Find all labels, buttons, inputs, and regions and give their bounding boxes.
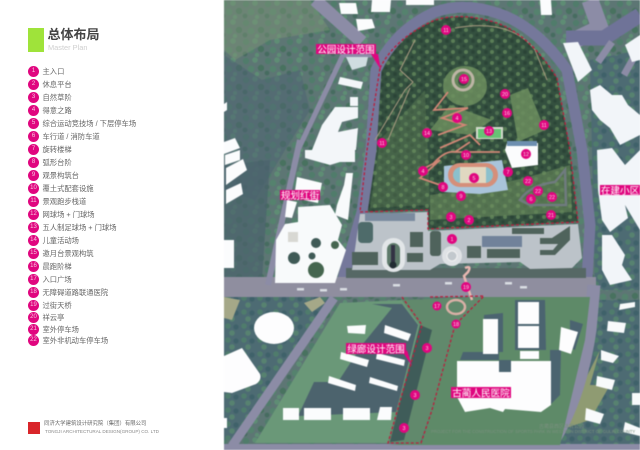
roundabout entrance bbox=[442, 246, 462, 266]
car path east bbox=[520, 170, 566, 205]
legend item 2: 2 bbox=[32, 81, 35, 87]
numbered map markers: 21 bbox=[548, 213, 554, 219]
legend item 2: 休息平台 bbox=[42, 80, 72, 89]
numbered map markers: 20 bbox=[502, 92, 508, 98]
numbered map markers: 12 bbox=[523, 152, 529, 158]
legend item 19: 19 bbox=[30, 302, 37, 308]
legend item 11: 景观跑步栈道 bbox=[42, 197, 86, 206]
legend item 6 bbox=[28, 131, 100, 142]
numbered map markers: 11 bbox=[379, 141, 385, 147]
south residential lawn bbox=[255, 300, 420, 443]
greenway tree line bbox=[390, 325, 432, 442]
footbridge 19 bbox=[464, 267, 472, 300]
legend item 10: 10 bbox=[30, 185, 37, 191]
civic plaza south of park bbox=[352, 212, 582, 270]
watermark: 古蔺县西区体育公园 bbox=[539, 423, 584, 430]
park ring road bbox=[342, 7, 590, 282]
legend item 7: 7 bbox=[32, 146, 35, 152]
legend item 1 bbox=[28, 66, 64, 77]
legend item 9 bbox=[28, 170, 79, 181]
numbered map markers bbox=[377, 25, 557, 433]
legend item 19 bbox=[28, 300, 72, 311]
red line: park boundary bbox=[360, 17, 578, 229]
plaza central oval bbox=[382, 238, 405, 272]
legend item 17 bbox=[28, 274, 72, 285]
northwest residential cluster bbox=[312, 57, 368, 150]
north buildings bbox=[339, 0, 552, 31]
legend item 22: 室外非机动车停车场 bbox=[42, 336, 108, 345]
callout: greenway design scope bbox=[346, 343, 412, 366]
legend item 7: 旋转楼梯 bbox=[42, 145, 72, 154]
legend item 5: 5 bbox=[32, 120, 35, 126]
callout: under construction community: 在建小区 bbox=[601, 185, 640, 197]
subtitle: Master Plan bbox=[48, 43, 87, 52]
numbered map markers: 4 bbox=[456, 116, 458, 122]
legend item 18: 无障碍道路联通医院 bbox=[42, 288, 108, 297]
legend item 19: 过街天桥 bbox=[42, 301, 72, 310]
legend item 16 bbox=[28, 261, 72, 272]
west edge buildings bbox=[224, 102, 247, 268]
roads bbox=[224, 0, 640, 449]
legend item 18 bbox=[28, 287, 108, 298]
legend item 10: 覆土式配套设施 bbox=[42, 184, 94, 193]
legend item 4: 得意之路 bbox=[42, 106, 72, 115]
plaza dark green blocks bbox=[352, 213, 570, 265]
south diagonal road bbox=[232, 298, 334, 446]
hospital buildings bbox=[457, 302, 578, 412]
legend item 17: 入口广场 bbox=[42, 275, 72, 284]
west road bbox=[268, 140, 300, 285]
legend item 4: 4 bbox=[32, 107, 35, 113]
numbered map markers: 18 bbox=[453, 322, 459, 328]
legend item 6: 车行道 / 消防车道 bbox=[42, 132, 100, 141]
legend item 13: 五人制足球场 + 门球场 bbox=[42, 223, 116, 232]
numbered map markers: 3 bbox=[414, 393, 416, 399]
numbered map markers: 22 bbox=[525, 179, 531, 185]
numbered map markers: 17 bbox=[434, 304, 440, 310]
numbered map markers: 10 bbox=[463, 153, 469, 159]
legend item 20: 20 bbox=[30, 314, 37, 320]
legend item 15 bbox=[28, 248, 94, 259]
numbered map markers: 11 bbox=[541, 123, 547, 129]
numbered map markers: 16 bbox=[504, 111, 510, 117]
numbered map markers: 22 bbox=[549, 195, 555, 201]
lawn clearings bbox=[370, 66, 572, 220]
numbered map markers: 3 bbox=[426, 346, 428, 352]
legend item 14: 14 bbox=[30, 237, 37, 243]
numbered map markers: 9 bbox=[460, 194, 462, 200]
red line: greenway boundary bbox=[388, 296, 484, 443]
numbered map markers: 5 bbox=[472, 176, 476, 182]
numbered map markers: 3 bbox=[402, 426, 406, 432]
shaded forest patches bbox=[224, 0, 640, 445]
callout: park design scope bbox=[316, 44, 381, 70]
numbered map markers: 8 bbox=[442, 185, 444, 191]
numbered map markers: 1 bbox=[450, 237, 454, 243]
road vehicles bbox=[297, 282, 527, 292]
legend item 21 bbox=[28, 324, 79, 335]
numbered map markers: 2 bbox=[468, 218, 470, 224]
legend item 11: 11 bbox=[30, 198, 37, 204]
legend item 4 bbox=[28, 105, 72, 116]
west central white complex bbox=[275, 150, 355, 283]
legend item 3: 3 bbox=[32, 94, 35, 100]
east south road bbox=[550, 285, 594, 446]
legend item 9: 观景构筑台 bbox=[42, 171, 79, 180]
legend list bbox=[28, 66, 136, 346]
numbered map markers: 3 bbox=[450, 215, 452, 221]
legend item 12: 网球场 + 门球场 bbox=[42, 210, 95, 219]
footer logo bbox=[28, 422, 40, 434]
panel: master plan map bbox=[223, 0, 640, 450]
callout: greenway design scope: 绿廊设计范围 bbox=[347, 344, 405, 356]
legend item 11 bbox=[28, 196, 86, 207]
dark strip below plaza bbox=[346, 268, 586, 278]
numbered map markers: 4 bbox=[422, 169, 424, 175]
legend item 9: 9 bbox=[32, 172, 35, 178]
football pitch bbox=[476, 127, 503, 139]
numbered map markers: 11 bbox=[443, 28, 449, 34]
numbered map markers: 15 bbox=[461, 77, 467, 83]
sports complex bbox=[444, 160, 508, 194]
footer company name: 同济大学建筑设计研究院（集团）有限公司 bbox=[44, 421, 146, 427]
numbered map markers: 6 bbox=[530, 197, 532, 203]
north branch road bbox=[315, 0, 362, 42]
legend item 3: 自然草阶 bbox=[42, 93, 72, 102]
numbered map markers: 22 bbox=[535, 189, 541, 195]
legend item 13: 13 bbox=[30, 224, 37, 230]
legend item 8: 8 bbox=[32, 159, 35, 165]
callout: Gulin people's hospital: 古蔺人民医院 bbox=[452, 388, 510, 400]
numbered map markers: 7 bbox=[506, 170, 510, 176]
west circular and rounded buildings bbox=[224, 312, 294, 428]
legend item 21: 21 bbox=[30, 326, 37, 332]
legend item 10 bbox=[28, 183, 94, 194]
north east branch road bbox=[575, 0, 600, 40]
south residential shade bbox=[298, 304, 418, 416]
east residential buildings bbox=[563, 35, 640, 285]
legend item 15: 15 bbox=[30, 250, 37, 256]
base terrain bbox=[224, 0, 640, 450]
legend item 1: 主入口 bbox=[42, 67, 64, 76]
numbered map markers: 13 bbox=[486, 129, 492, 135]
park ground bbox=[360, 17, 578, 229]
callout: planned red street: 规划红街 bbox=[281, 190, 320, 202]
legend item 16: 晨跑阶梯 bbox=[42, 262, 72, 271]
legend item 1: 1 bbox=[32, 68, 35, 74]
legend item 21: 室外停车场 bbox=[42, 325, 79, 334]
numbered map markers: 14 bbox=[424, 131, 430, 137]
footbridge landing bbox=[447, 300, 465, 314]
legend item 18: 18 bbox=[30, 289, 37, 295]
green title block bbox=[28, 28, 44, 52]
watermark bbox=[431, 423, 635, 434]
legend item 15: 邀月台景观构筑 bbox=[42, 249, 94, 258]
running trail bbox=[375, 26, 547, 140]
amenity plaza pink paths bbox=[420, 92, 500, 185]
legend item 22 bbox=[28, 335, 108, 346]
legend item 3 bbox=[28, 92, 72, 103]
legend item 2 bbox=[28, 79, 72, 90]
legend item 14: 儿童活动场 bbox=[42, 236, 79, 245]
legend item 5: 综合运动竞技场 / 下层停车场 bbox=[42, 119, 136, 128]
south greenway strip bbox=[388, 297, 484, 443]
legend item 8 bbox=[28, 157, 72, 168]
numbered map markers: 19 bbox=[463, 285, 469, 291]
legend item 14 bbox=[28, 235, 79, 246]
legend item 8: 弧形台阶 bbox=[42, 158, 72, 167]
watermark: PROJECT FOR THE CONSTRUCTION OF SPORTS PARK IN WESTERN DISTRICT OF GULIN COUNTY bbox=[431, 429, 635, 434]
moon terrace ring bbox=[453, 70, 473, 90]
tennis courts building bbox=[505, 141, 538, 168]
legend item 6: 6 bbox=[32, 133, 35, 139]
footer company name english: TONGJI ARCHITECTURAL DESIGN(GROUP) CO. LTD bbox=[45, 429, 159, 434]
callout: park design scope: 公园设计范围 bbox=[317, 44, 375, 56]
east low rise buildings bbox=[585, 302, 640, 436]
legend item 17: 17 bbox=[30, 276, 37, 282]
legend item 20: 祥云亭 bbox=[42, 313, 64, 322]
panel: sidebar bbox=[0, 0, 224, 450]
bottom road bbox=[224, 444, 640, 450]
title: 总体布局 bbox=[48, 27, 100, 42]
legend item 7 bbox=[28, 144, 72, 155]
legend item 13 bbox=[28, 222, 116, 233]
hospital building shadows bbox=[460, 300, 583, 405]
main east west road bbox=[224, 277, 596, 297]
legend item 20 bbox=[28, 312, 64, 323]
south residential buildings bbox=[283, 325, 411, 420]
west connector road bbox=[298, 55, 372, 150]
legend item 12: 12 bbox=[30, 211, 37, 217]
legend item 22: 22 bbox=[30, 337, 37, 343]
hospital lawn bbox=[388, 297, 590, 445]
legend item 12 bbox=[28, 209, 95, 220]
legend item 16: 16 bbox=[30, 263, 37, 269]
